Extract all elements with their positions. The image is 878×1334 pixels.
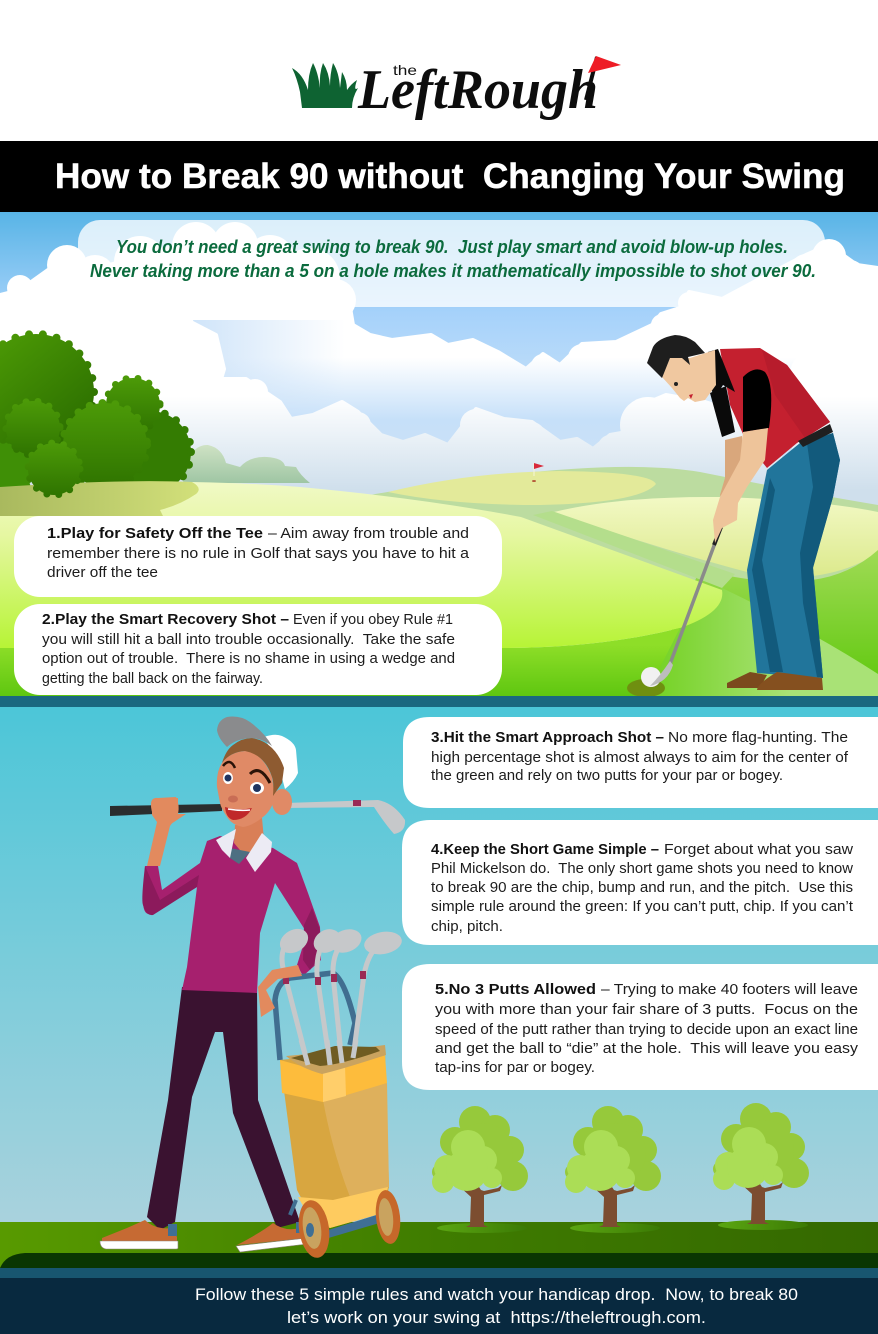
icon: red flag (586, 56, 621, 100)
tree 3 (713, 1103, 809, 1230)
rule 4 text: 4.Keep the Short Game Simple – (431, 842, 659, 858)
rule 1 text: – Aim away from trouble and (268, 526, 469, 542)
belt (798, 424, 833, 447)
rule 2 text: getting the ball back on the fairway. (42, 671, 263, 687)
head (662, 350, 716, 402)
panel: rule 5 (402, 964, 878, 1090)
back wheel (373, 1189, 403, 1245)
light strip (600, 588, 878, 697)
footer text: Follow these 5 simple rules and watch your handicap drop. Now, to break 80 (195, 1285, 798, 1304)
rule 5 text: – Trying to make 40 footers will leave (601, 982, 858, 998)
black collar and shirt (708, 349, 735, 437)
intro text (90, 237, 816, 281)
rule 3 text: the green and rely on two putts for your par or bogey. (431, 768, 783, 784)
club head and ball (641, 661, 673, 687)
left shoe (100, 1220, 178, 1249)
far green with flag (388, 463, 656, 505)
hair (222, 738, 284, 796)
cap back (264, 735, 298, 789)
logo: The Left Rough (292, 56, 621, 121)
rule 5 text: you with more than your fair share of 3 putts. Focus on the (435, 1002, 858, 1018)
shoes (727, 672, 823, 690)
back clouds (0, 222, 878, 510)
trousers (747, 433, 840, 678)
sky (0, 212, 878, 512)
trousers (147, 987, 300, 1230)
sweater (143, 836, 321, 993)
sleeve (743, 369, 771, 432)
distant trees (183, 445, 310, 483)
rule 4 text: chip, pitch. (431, 919, 503, 935)
panel: rule 3 (403, 717, 878, 808)
shouldered club (110, 800, 405, 834)
bush front (28, 443, 80, 495)
club shaft (670, 527, 721, 664)
bushes (0, 334, 191, 493)
title: How to Break 90 without Changing Your Swing (55, 157, 845, 196)
rule 4 text: to break 90 are the chip, bump and run, and the pitch. Use this (431, 880, 853, 896)
panel: rule 4 (402, 820, 878, 945)
panel: golf course scene (0, 212, 878, 697)
rule 2 text: 2.Play the Smart Recovery Shot – (42, 612, 289, 628)
right pale hill (554, 497, 878, 578)
hand on club (151, 797, 186, 826)
ear (272, 789, 292, 815)
rule 3 text: No more flag-hunting. The (668, 730, 848, 746)
rule 1 text: driver off the tee (47, 565, 158, 581)
rule 2 text: you will still hit a ball into trouble occasionally. Take the safe (42, 632, 455, 648)
rule 2 text: Even if you obey Rule #1 (293, 612, 453, 628)
ball shadow (627, 679, 665, 697)
right green slope (640, 550, 878, 697)
club shafts in bag (301, 1040, 356, 1065)
cap visor (217, 717, 272, 747)
icon: grass tuft (292, 63, 358, 108)
tree 2 (565, 1106, 661, 1233)
divider band (0, 696, 878, 707)
logo wordmark: LeftRough (357, 59, 598, 121)
ground grass band (0, 1222, 878, 1270)
rule 5 text: 5.No 3 Putts Allowed (435, 982, 596, 998)
right shoe (236, 1222, 307, 1252)
head (217, 751, 275, 827)
title band (0, 141, 878, 212)
far green hill (370, 467, 878, 600)
hand on bag (258, 965, 302, 1017)
rule 5 text: tap-ins for par or bogey. (435, 1060, 595, 1076)
front arm and hand (713, 428, 768, 543)
logo wordmark: the (393, 62, 417, 78)
illustration: golfer putting (627, 335, 840, 697)
bush ground shadow (0, 481, 199, 516)
footer text (195, 1285, 798, 1327)
rule 5 text: speed of the putt rather than trying to decide upon an exact line (435, 1022, 858, 1038)
golf bag (280, 1045, 389, 1239)
right cloud (790, 334, 878, 510)
rule 2 text (42, 612, 455, 687)
panel: rule 2 (14, 604, 502, 695)
rule 1 text: 1.Play for Safety Off the Tee (47, 526, 263, 542)
intro text: You don’t need a great swing to break 90. Just play smart and avoid blow-up holes. (116, 237, 788, 257)
rule 2 text: option out of trouble. There is no shame in using a wedge and (42, 651, 455, 667)
icon: pin flag (532, 463, 544, 482)
lime main fairway (0, 482, 722, 648)
rule 4 text: simple rule around the green: If you can’t putt, chip. If you can’t (431, 899, 853, 915)
hair (647, 335, 705, 378)
rule 5 text (435, 982, 859, 1076)
green band between hills (533, 511, 735, 588)
rule 3 text (431, 730, 849, 784)
footer text: let’s work on your swing at https://theleftrough.com. (287, 1308, 706, 1327)
rule 5 text: and get the ball to “die” at the hole. This will leave you easy (435, 1041, 859, 1057)
rule 3 text: high percentage shot is almost always to aim for the center of (431, 750, 849, 766)
raised arm (147, 798, 178, 866)
intro text: Never taking more than a 5 on a hole makes it mathematically impossible to shot over 90. (90, 261, 816, 281)
rule 4 text: Phil Mickelson do. The only short game shots you need to know (431, 861, 854, 877)
lower fairway green (0, 628, 680, 697)
face details (223, 762, 270, 820)
front clouds (0, 300, 878, 520)
collar (216, 829, 272, 872)
neck (234, 818, 264, 856)
tree 1 (432, 1106, 528, 1233)
dark grass strip (0, 1253, 878, 1268)
bag frame (275, 973, 355, 1060)
golf clubs (282, 940, 382, 1065)
back arm (720, 436, 745, 510)
panel: lower scene background (0, 707, 878, 1222)
rule 3 text: 3.Hit the Smart Approach Shot – (431, 730, 664, 746)
footer teal strip (0, 1268, 878, 1278)
rule 1 text: remember there is no rule in Golf that says you have to hit a (47, 546, 470, 562)
rule 4 text (431, 842, 854, 935)
intro box (78, 220, 825, 307)
rule 4 text: Forget about what you saw (664, 842, 854, 858)
footer panel (0, 1278, 878, 1334)
front wheel (295, 1198, 333, 1260)
illustration: caddie with golf bag (100, 717, 405, 1260)
sky tint between cloud layers (185, 320, 355, 420)
panel: rule 1 (14, 516, 502, 597)
red vest (720, 348, 830, 468)
rule 1 text (47, 526, 470, 581)
